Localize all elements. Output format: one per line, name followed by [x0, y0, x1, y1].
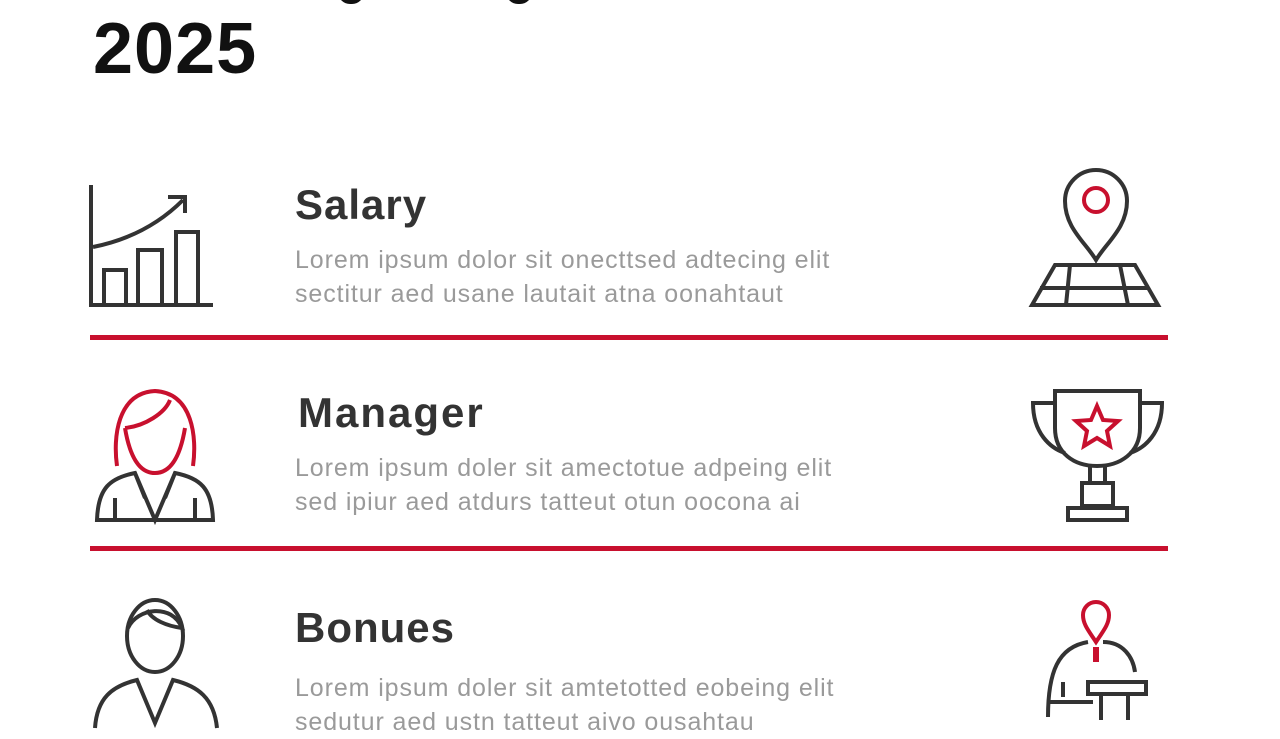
title fragment (cropped descenders) [341, 0, 529, 4]
icon: man [93, 598, 219, 728]
divider 2 [90, 546, 1168, 551]
icon: map pin [1028, 168, 1162, 307]
icon: person at desk [1046, 600, 1148, 720]
text: manager description [295, 454, 832, 516]
divider 1 [90, 335, 1168, 340]
text: salary description [295, 246, 830, 308]
heading: Bonues: Bonues [295, 604, 455, 651]
panel: manager [94, 389, 1164, 525]
text: salary description: Lorem ipsum dolor sit onecttsed adtecing elit [295, 246, 830, 274]
panel: bonuses [93, 598, 1148, 736]
icon: woman manager [94, 389, 216, 525]
icon: trophy [1031, 389, 1164, 522]
title year: 2025 [93, 9, 257, 89]
text: salary description: sectitur aed usane lautait atna oonahtaut [295, 280, 784, 308]
panel: salary [89, 168, 1162, 308]
heading: Salary: Salary [295, 181, 427, 228]
text: bonuses description [295, 674, 834, 736]
text: manager description: sed ipiur aed atdurs tatteut otun oocona ai [295, 488, 801, 516]
heading: Manager: Manager [298, 389, 485, 436]
text: bonuses description: sedutur aed ustn tatteut aivo ousahtau [295, 708, 755, 736]
text: manager description: Lorem ipsum doler sit amectotue adpeing elit [295, 454, 832, 482]
text: bonuses description: Lorem ipsum doler sit amtetotted eobeing elit [295, 674, 834, 702]
icon: bar chart [89, 185, 213, 307]
